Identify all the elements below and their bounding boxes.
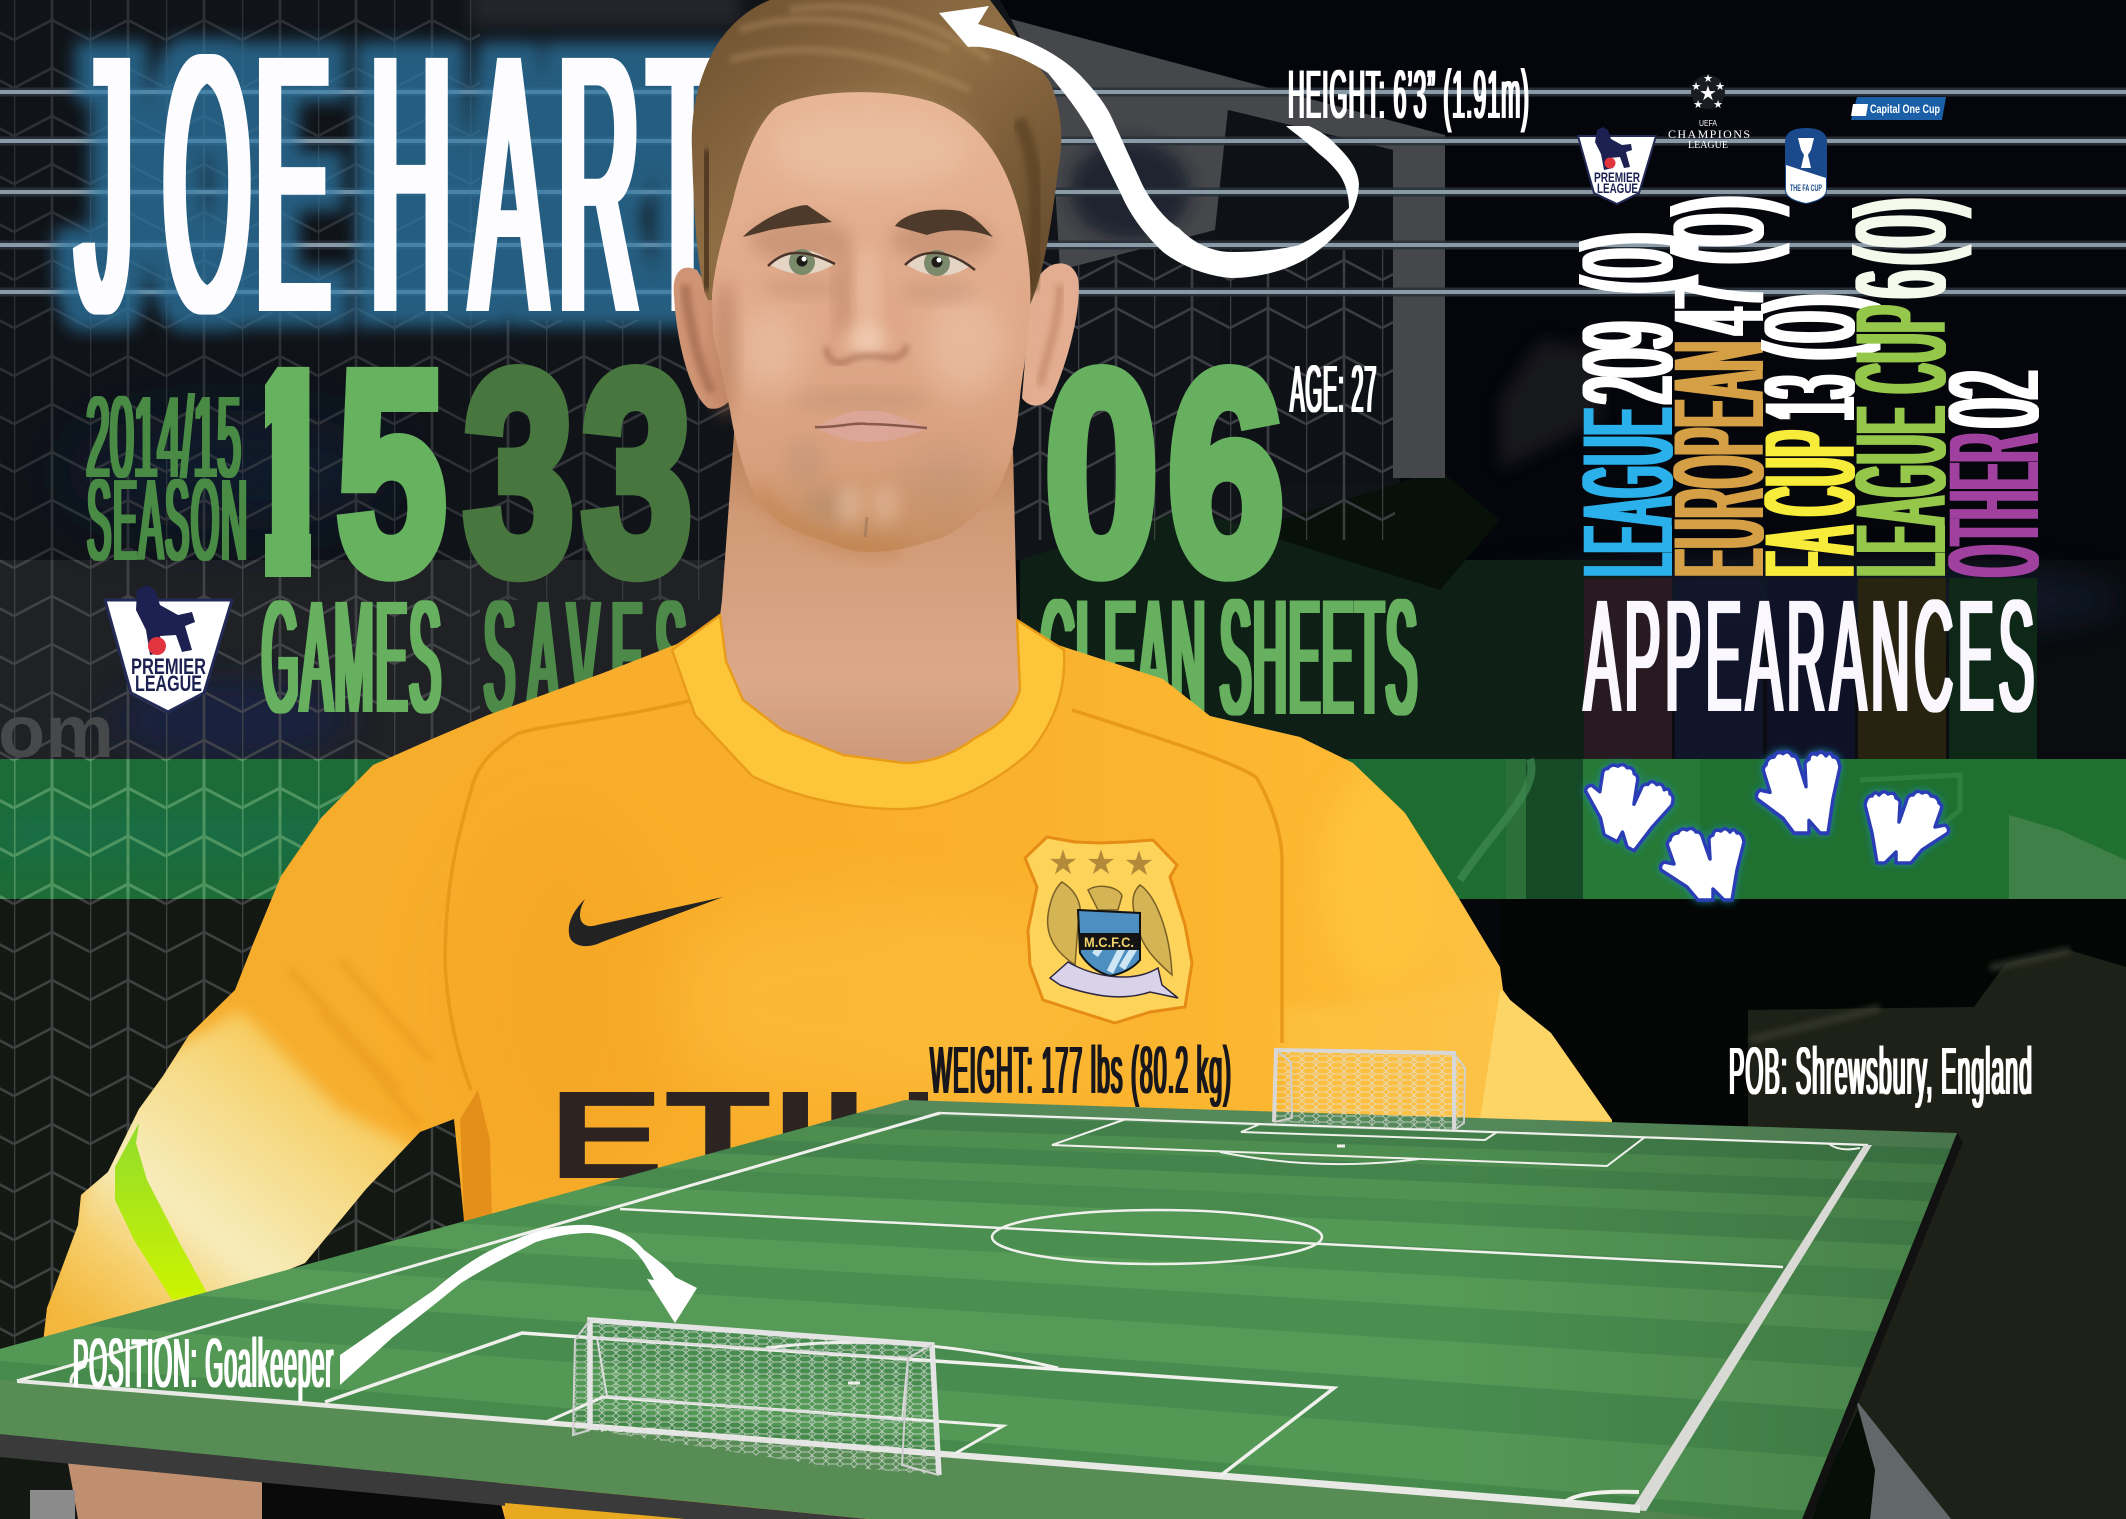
nose	[827, 324, 906, 363]
season label	[86, 372, 249, 585]
torso side panel	[460, 1090, 492, 1222]
appearances chart: fa cup: FA CUP	[1739, 429, 1882, 576]
club crest	[1025, 837, 1192, 1023]
stat: saves 33	[464, 314, 699, 746]
fa cup logo: THE FA CUP	[1790, 183, 1822, 193]
title: JOE HART	[77, 0, 716, 390]
face shading	[713, 112, 1007, 549]
small premier league logo: PREMIER	[1594, 169, 1640, 185]
left eye	[768, 249, 835, 275]
football pitch: POSITION: Goalkeeper	[73, 1324, 334, 1402]
icon: glove 3	[1756, 752, 1840, 833]
appearances chart: league cup	[1830, 198, 1973, 576]
stat: games 15	[261, 366, 446, 714]
football pitch	[0, 1050, 2126, 1519]
arrow: position to goal	[340, 1225, 697, 1385]
near goal	[573, 1320, 939, 1475]
dark area under pitch	[262, 1480, 510, 1519]
capital one cup logo: Capital One Cup	[1870, 102, 1940, 116]
champions league logo: CHAMPIONS	[1668, 127, 1750, 141]
appearances chart: league	[1557, 233, 1700, 576]
far penalty area	[1052, 1119, 1860, 1166]
champions league logo: ★	[1693, 98, 1703, 111]
appearances chart: league: LEAGUE	[1557, 407, 1700, 576]
pitch markings	[17, 1113, 1872, 1513]
champions league logo	[1668, 72, 1750, 151]
appearances chart: european: 47	[1648, 282, 1791, 334]
small premier league logo	[1578, 127, 1656, 204]
club crest: ★	[1048, 843, 1078, 883]
text: WEIGHT: 177 lbs (80.2 kg)	[930, 1033, 1232, 1108]
pitch right edge	[1802, 1133, 1963, 1519]
arrow: height to head	[939, 6, 1359, 278]
icon: glove 1	[1571, 754, 1678, 856]
sleeve armband	[115, 1123, 207, 1300]
appearances chart: league cup: 6	[1830, 271, 1973, 298]
text: OTHER	[1923, 432, 2066, 576]
stat: games 15: 5	[337, 314, 446, 632]
text: AGE: 27	[1290, 352, 1377, 427]
jersey logo: swoosh	[569, 897, 723, 946]
text: SAVES	[484, 567, 699, 746]
text: (0)	[1739, 294, 1882, 360]
champions league logo: UEFA	[1699, 119, 1718, 128]
appearances chart: fa cup	[1739, 294, 1882, 576]
face	[712, 92, 1030, 552]
small premier league logo: LEAGUE	[1597, 180, 1638, 196]
left eyebrow	[743, 205, 832, 237]
goal post wedge	[1011, 19, 1445, 478]
appearances column reflections	[1584, 578, 2037, 759]
right eye	[905, 250, 975, 276]
stat: games 15: 1	[232, 314, 340, 632]
jersey sponsor text: ETIHAD	[548, 1066, 1198, 1205]
text: 2014/15	[86, 372, 241, 502]
champions league logo: ★	[1703, 72, 1713, 85]
green band	[0, 759, 2126, 899]
appearances chart: other	[1923, 371, 2066, 576]
right eyebrow	[895, 210, 993, 237]
fa cup logo	[1785, 128, 1827, 204]
dark grass at right	[1748, 950, 2126, 1519]
gloves icons	[1571, 752, 1949, 900]
club crest: ★	[1086, 843, 1116, 883]
pitch turf with stripes	[0, 1100, 1957, 1519]
stat: saves 33: 3	[464, 314, 574, 632]
mouth	[815, 411, 927, 442]
collar	[672, 615, 1064, 809]
icon: glove 2	[1660, 828, 1744, 900]
chin dimple	[865, 517, 867, 537]
text: SEASON	[87, 455, 249, 585]
text: (0)	[1648, 196, 1791, 264]
player: forearm below pitch	[68, 1463, 262, 1519]
stat: clean sheets 06	[1040, 314, 1419, 749]
shirt	[20, 610, 1620, 1519]
appearances chart: league: 209	[1557, 322, 1700, 404]
far goal	[1274, 1050, 1465, 1130]
player: goalkeeper portrait	[20, 0, 1620, 1519]
appearances chart: fa cup: 13	[1739, 376, 1882, 420]
club crest: M.C.F.C.	[1084, 934, 1134, 950]
text: (0)	[1557, 233, 1700, 293]
ears	[674, 268, 730, 409]
player's boot in background	[1856, 1400, 1951, 1519]
touchlines	[17, 1113, 1872, 1513]
champions league logo: ★	[1715, 80, 1725, 93]
text: HEIGHT: 6’3” (1.91m)	[1288, 56, 1530, 133]
premier league logo	[105, 585, 232, 712]
stat: clean sheets 06: CLEAN	[1040, 565, 1207, 749]
stat: clean sheets 06: 0	[1045, 314, 1158, 632]
champions league logo: ★	[1691, 80, 1701, 93]
appearances chart: european	[1648, 196, 1791, 576]
near penalty area	[71, 1333, 1639, 1502]
hair	[692, 0, 1061, 305]
text: SHEETS	[1220, 565, 1419, 749]
shirt hem below pitch	[505, 1503, 685, 1519]
neck	[712, 420, 1042, 795]
champions league logo: LEAGUE	[1688, 140, 1728, 151]
club crest: ★	[1124, 844, 1154, 884]
premier league logo: LEAGUE	[135, 671, 202, 696]
horizontal scan lines	[0, 92, 2126, 292]
text: 02	[1923, 371, 2066, 427]
champions league logo: ★	[1699, 81, 1717, 105]
stat: clean sheets 06: 6	[1168, 314, 1284, 632]
halfway line and centre circle	[620, 1209, 1783, 1267]
faded sponsor letters in background: om	[0, 690, 114, 773]
icon: glove 4	[1865, 791, 1949, 863]
grey block bottom left	[30, 1490, 75, 1519]
text: GAMES	[262, 567, 443, 746]
text: (0)	[1830, 198, 1973, 265]
premier league logo: PREMIER	[131, 654, 206, 679]
stat: saves 33: 3	[582, 314, 692, 632]
net in background	[0, 0, 480, 560]
pitch front edge	[0, 1434, 868, 1519]
champions league logo: ★	[1713, 98, 1723, 111]
capital one cup logo	[1851, 97, 1946, 120]
